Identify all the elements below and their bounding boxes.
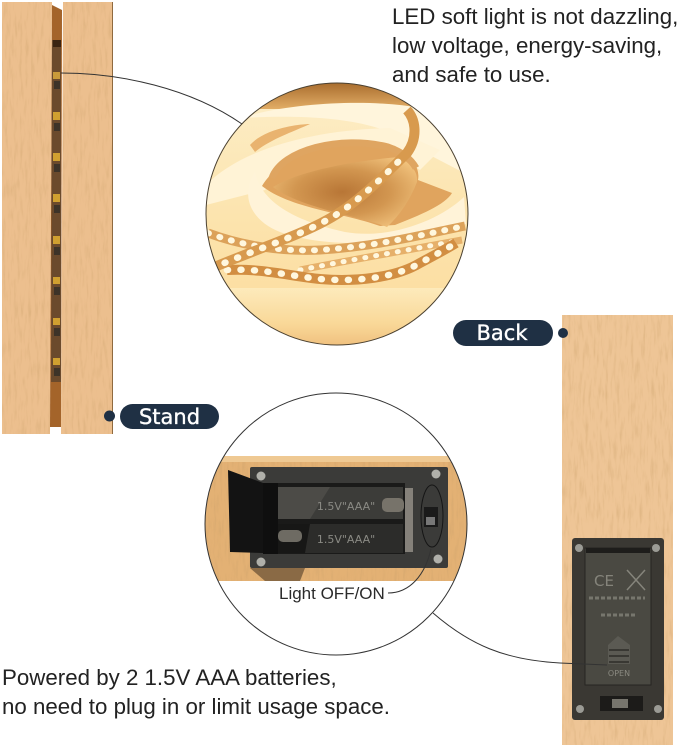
back of stand with battery cover: [562, 315, 673, 745]
LED strip loops: [208, 110, 465, 280]
callout text: LED soft light: and safe to use.: [392, 62, 551, 87]
battery compartment close-up circle: 1.5V"AAA": [317, 500, 375, 513]
callout text: LED soft light: LED soft light is not dazzling,: [392, 4, 678, 29]
back of stand with battery cover: OPEN: [608, 669, 630, 678]
battery compartment close-up circle: 1.5V"AAA": [317, 533, 375, 546]
callout text: batteries: no need to plug in or limit usage space.: [2, 694, 390, 719]
leader line: switch to label: [388, 549, 431, 593]
label: Back: [453, 320, 568, 346]
leader line: LED strip to close-up: [61, 73, 242, 124]
stand: wooden base with LED slot: [2, 2, 113, 434]
back of stand with battery cover: CE: [594, 572, 614, 590]
label: Light OFF/ON: Light OFF/ON: [279, 584, 385, 603]
leader line: back cover to battery close-up: [433, 613, 607, 665]
battery compartment close-up circle: [205, 393, 467, 655]
label: Back: Back: [477, 321, 528, 345]
callout text: batteries: Powered by 2 1.5V AAA batteries,: [2, 665, 337, 690]
LED strip close-up circle: [206, 83, 468, 348]
label: Stand: [104, 404, 219, 429]
callout text: LED soft light: low voltage, energy-saving,: [392, 33, 662, 58]
label: Stand: Stand: [139, 405, 200, 429]
